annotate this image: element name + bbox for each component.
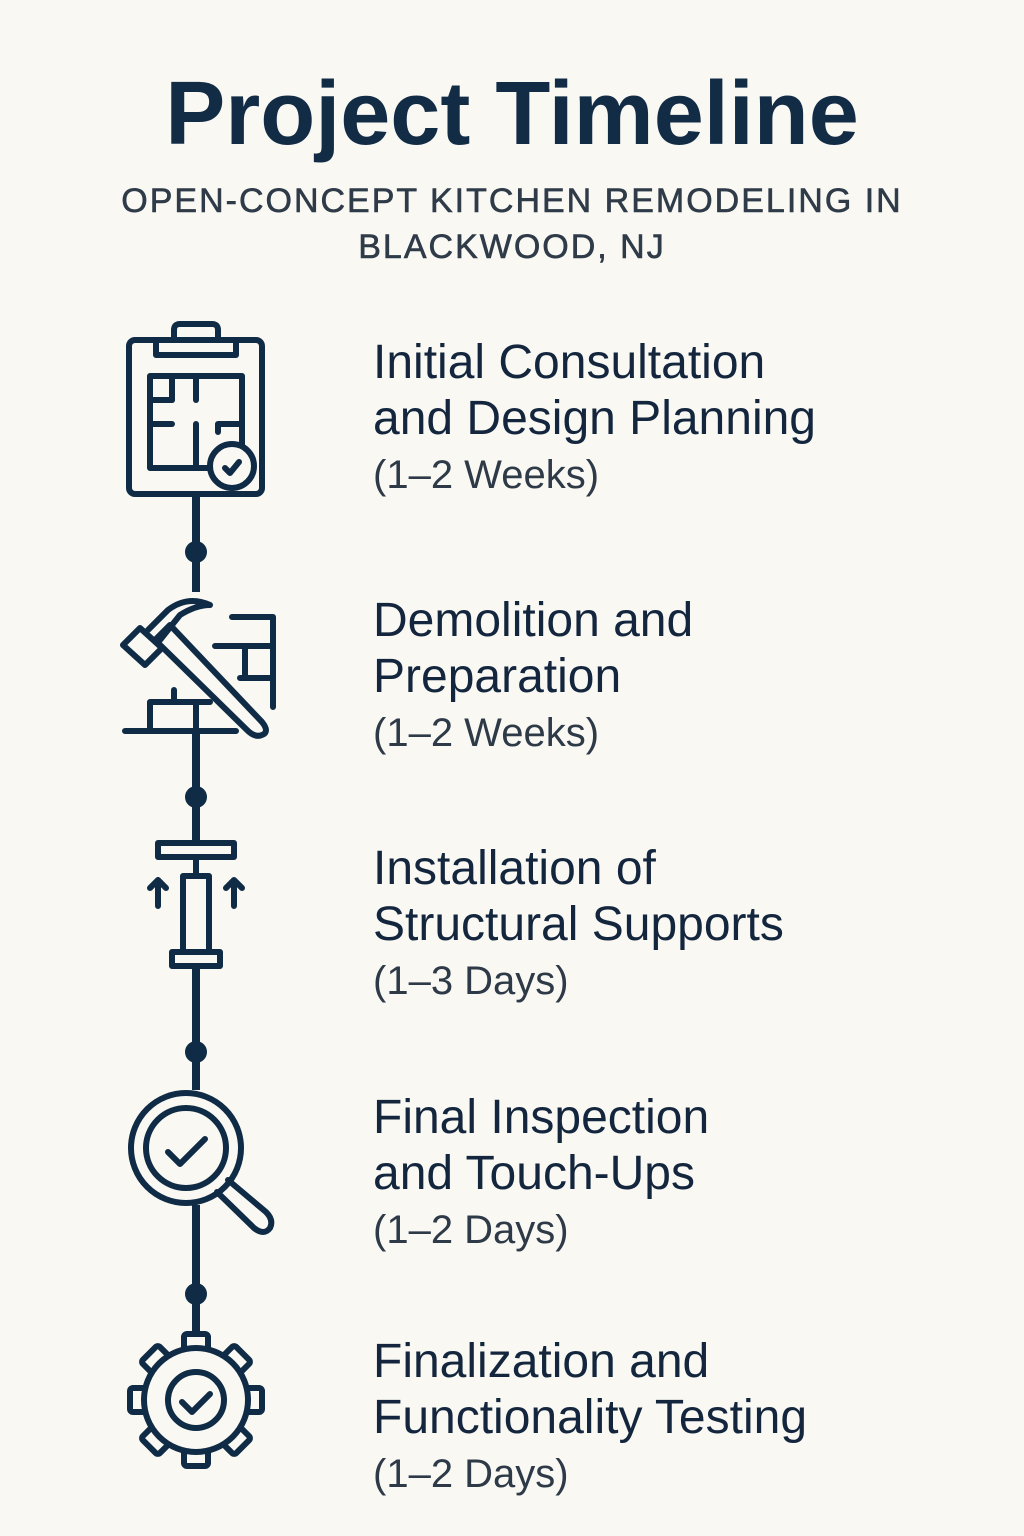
- step 3 text: Structural Supports: [373, 898, 784, 951]
- step 2 text: Preparation: [373, 650, 621, 703]
- step 5 text: (1–2 Days): [373, 1452, 569, 1496]
- step 3 text: [373, 842, 784, 1003]
- step 1 text: and Design Planning: [373, 392, 816, 445]
- step 3 text: (1–3 Days): [373, 959, 569, 1003]
- icon: clipboard floor plan: [129, 324, 262, 494]
- step 3 text: Installation of: [373, 842, 657, 895]
- step 4 text: [373, 1091, 709, 1252]
- step 2 text: [373, 594, 693, 755]
- step 1 text: [373, 336, 816, 497]
- step 4 text: and Touch-Ups: [373, 1147, 695, 1200]
- step 5 text: Functionality Testing: [373, 1391, 807, 1444]
- icon: structural support post: [150, 843, 242, 966]
- subtitle: OPEN-CONCEPT KITCHEN REMODELING IN: [121, 182, 903, 220]
- step 4 text: (1–2 Days): [373, 1208, 569, 1252]
- step 5 text: [373, 1335, 807, 1496]
- step 2 text: (1–2 Weeks): [373, 711, 599, 755]
- timeline spine: [185, 495, 207, 1340]
- step 5 text: Finalization and: [373, 1335, 709, 1388]
- icon: gear with check: [130, 1334, 262, 1466]
- title: Project Timeline: [165, 64, 859, 164]
- subtitle: [121, 182, 903, 266]
- step 2 text: Demolition and: [373, 594, 693, 647]
- step 1 text: (1–2 Weeks): [373, 453, 599, 497]
- step 4 text: Final Inspection: [373, 1091, 709, 1144]
- subtitle: BLACKWOOD, NJ: [358, 228, 666, 266]
- icon: hammer and bricks: [123, 601, 273, 736]
- icon: magnifier with check: [131, 1093, 271, 1232]
- step 1 text: Initial Consultation: [373, 336, 765, 389]
